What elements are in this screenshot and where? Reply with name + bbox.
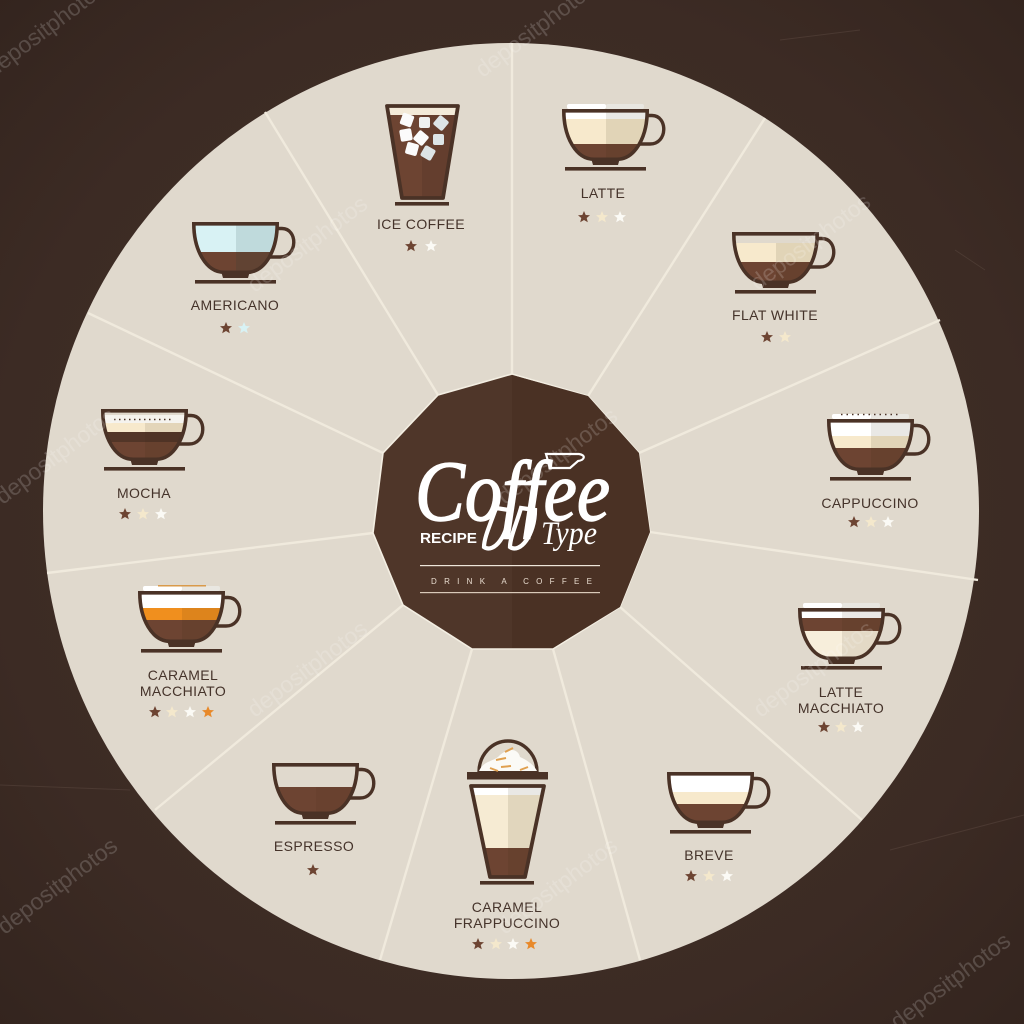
label line 2: FRAPPUCCINO [454, 915, 560, 931]
label: LATTE [581, 185, 625, 201]
icon: americano cup [192, 222, 294, 284]
item: caramel frappuccino [454, 741, 560, 949]
rating stars [119, 508, 167, 519]
icon: cappuccino cup [827, 414, 929, 481]
label: MOCHA [117, 485, 171, 501]
text: Type: Type [541, 516, 597, 552]
title: Coffee: Coffee [415, 443, 610, 539]
label: ICE COFFEE [377, 216, 465, 232]
rating stars [685, 870, 733, 881]
icon: frappuccino cup [467, 741, 548, 885]
watermarks: depositphotos [492, 832, 622, 939]
rating stars [761, 331, 791, 342]
watermarks: depositphotos [492, 402, 622, 509]
rating stars [472, 938, 537, 949]
watermarks: depositphotos [748, 615, 878, 722]
rating stars [149, 706, 214, 717]
icon: flat white cup [732, 234, 834, 294]
icon: latte cup [562, 104, 664, 171]
item: breve [667, 772, 769, 881]
item: latte [562, 104, 664, 222]
label line 2: MACCHIATO [140, 683, 226, 699]
item: cappuccino [821, 414, 929, 527]
item: flat white [732, 234, 834, 342]
watermarks: depositphotos [745, 188, 875, 295]
item: espresso [272, 765, 374, 875]
item: latte macchiato [798, 603, 900, 732]
text: RECIPE: RECIPE [420, 531, 477, 547]
icon: espresso cup [272, 765, 374, 825]
item: ice coffee [377, 104, 465, 251]
text: DRINK A COFFEE: DRINK A COFFEE [431, 577, 592, 586]
icon: small cup [546, 454, 584, 468]
icon: ice coffee glass [385, 104, 460, 206]
rating stars [220, 322, 250, 333]
rating stars [848, 516, 894, 527]
label: ESPRESSO [274, 838, 354, 854]
label line 2: MACCHIATO [798, 700, 884, 716]
rating stars [578, 211, 626, 222]
label: AMERICANO [191, 297, 279, 313]
icon: breve cup [667, 772, 769, 834]
watermarks: depositphotos [242, 190, 372, 297]
flourish: long f descenders [484, 508, 535, 548]
label: CARAMEL [148, 667, 218, 683]
label: BREVE [684, 847, 734, 863]
watermarks: depositphotos [242, 615, 372, 722]
icon: mocha cup [101, 411, 203, 471]
label: LATTE [819, 684, 863, 700]
icon: caramel macchiato cup [138, 585, 240, 653]
item: caramel macchiato [138, 585, 240, 717]
rating stars [405, 240, 437, 251]
rating stars [818, 721, 864, 732]
item: mocha [101, 411, 203, 519]
panel: center title badge [373, 374, 650, 649]
label: CAPPUCCINO [821, 495, 919, 511]
item: americano [191, 222, 294, 333]
label: CARAMEL [472, 899, 542, 915]
icon: latte macchiato cup [798, 603, 900, 670]
rating star [307, 864, 319, 875]
label: FLAT WHITE [732, 307, 818, 323]
